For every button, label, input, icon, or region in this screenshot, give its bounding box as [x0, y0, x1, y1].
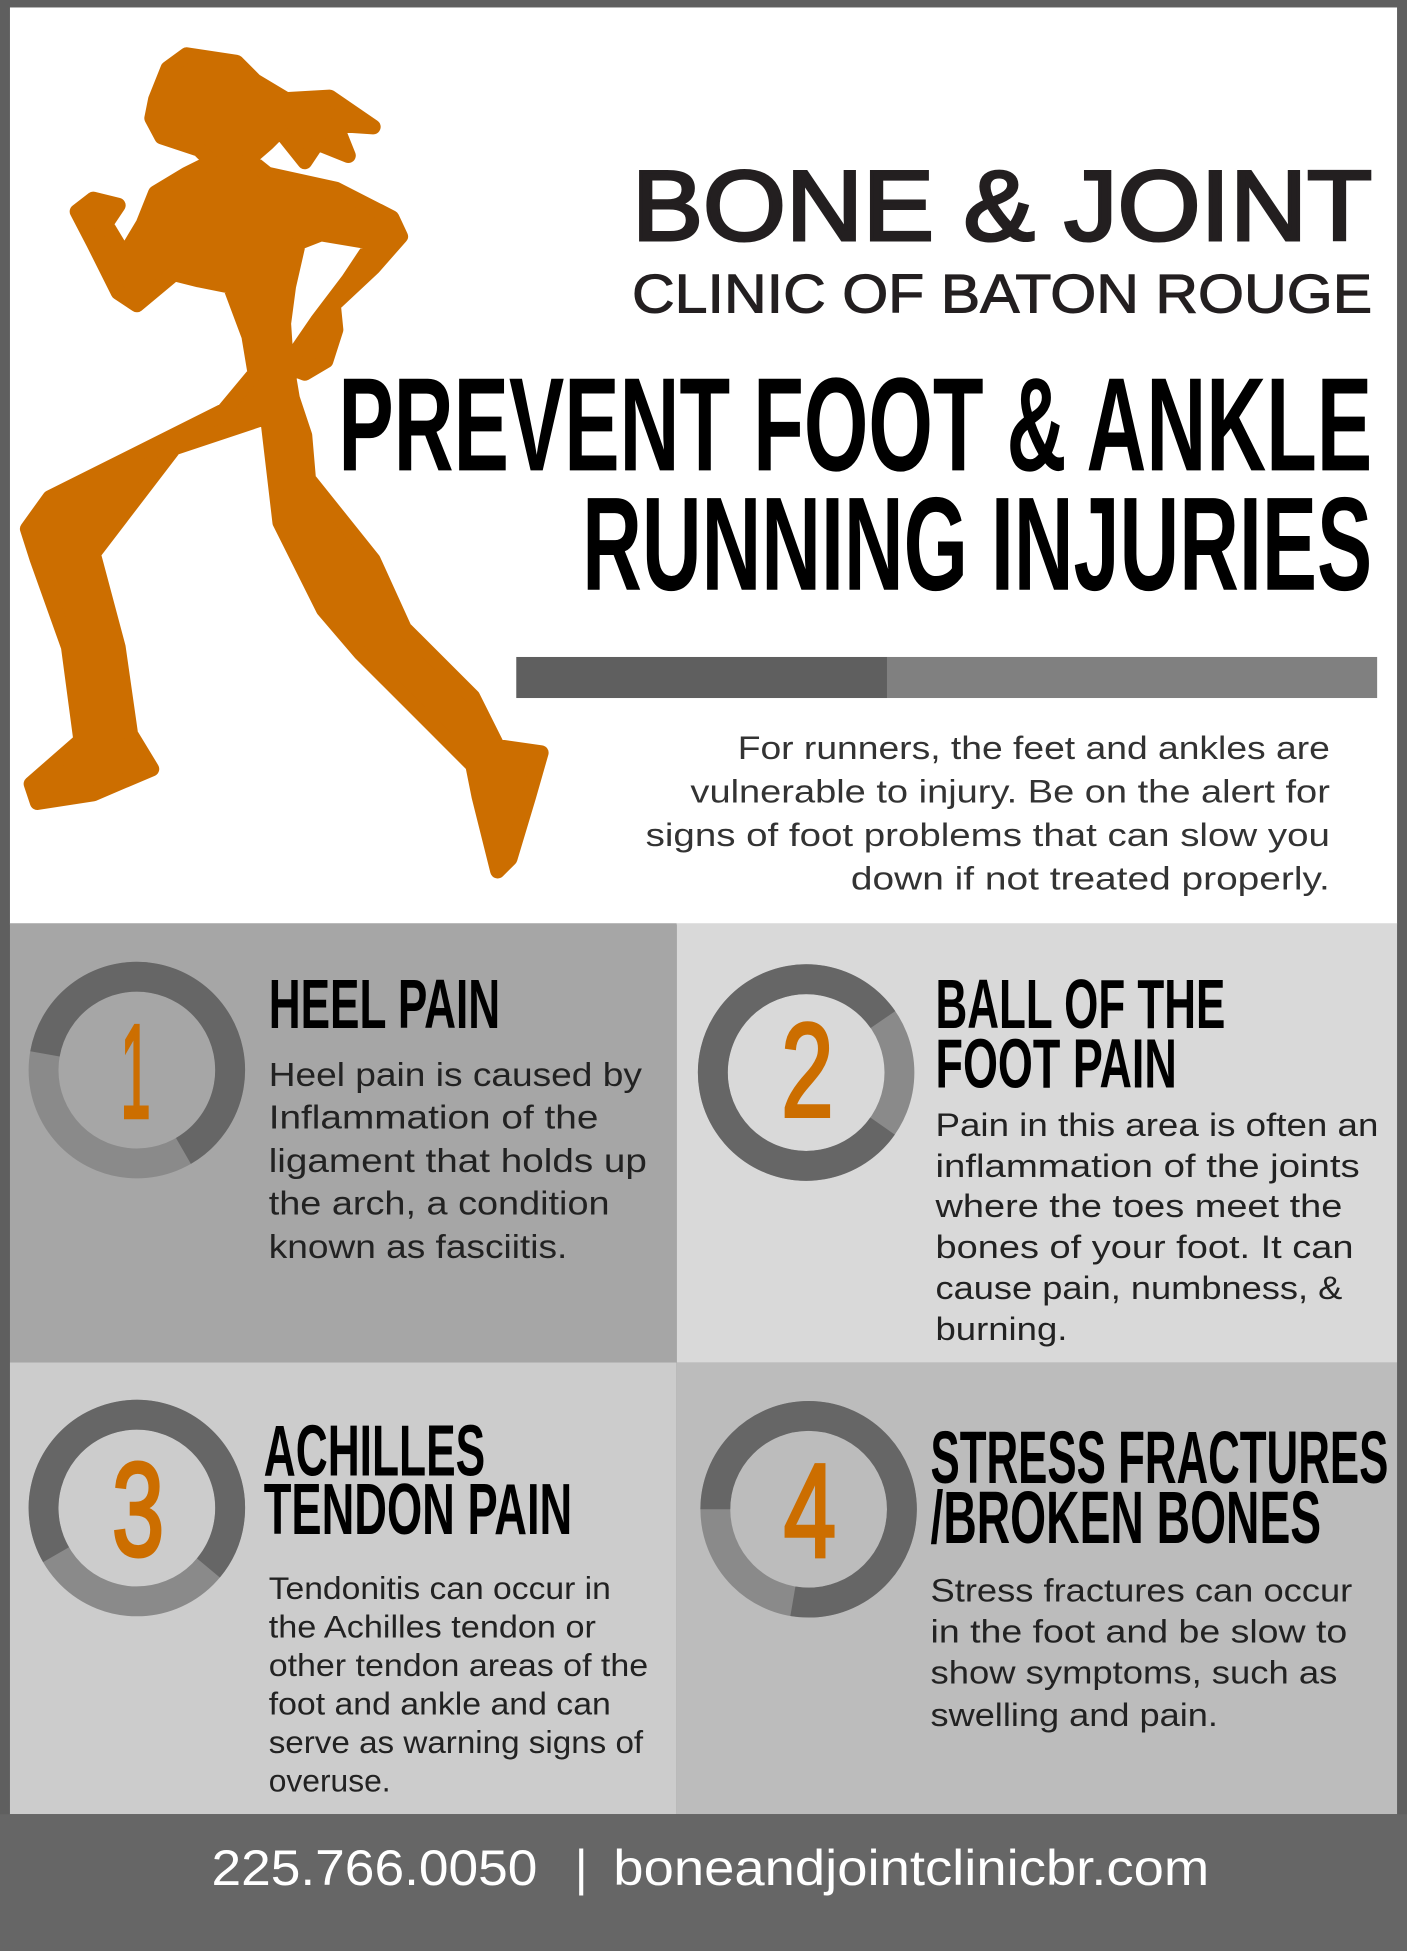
- intro text: [646, 730, 1330, 897]
- body: the Achilles tendon or: [269, 1609, 596, 1644]
- body: [934, 1107, 1378, 1347]
- body: known as fasciitis.: [269, 1229, 567, 1266]
- intro text: signs of foot problems that can slow you: [646, 817, 1330, 853]
- heading: [931, 1415, 1388, 1559]
- body: ligament that holds up: [269, 1143, 647, 1180]
- body: in the foot and be slow to: [931, 1613, 1347, 1649]
- body: the arch, a condition: [269, 1185, 610, 1222]
- heading: [936, 965, 1225, 1102]
- footer: 225.766.0050: [211, 1840, 537, 1896]
- panel 1: heel pain: [10, 923, 677, 1362]
- icon: ring 2: 2: [781, 996, 834, 1145]
- intro text: vulnerable to injury. Be on the alert for: [690, 774, 1330, 810]
- panel 2: ball of the foot: [676, 923, 1397, 1362]
- icon: ring 4: [715, 1416, 902, 1603]
- body: [269, 1057, 647, 1266]
- body: cause pain, numbness, &: [936, 1270, 1343, 1306]
- panel 3: achilles: [9, 1362, 677, 1814]
- body: Tendonitis can occur in: [269, 1571, 611, 1606]
- icon: ring 3: 3: [112, 1435, 164, 1584]
- body: Inflammation of the: [269, 1100, 598, 1137]
- intro text: down if not treated properly.: [851, 861, 1330, 897]
- heading: FOOT PAIN: [936, 1024, 1177, 1102]
- body: other tendon areas of the: [269, 1648, 648, 1683]
- heading: ACHILLES: [264, 1412, 485, 1492]
- logo: CLINIC OF BATON ROUGE: [632, 262, 1372, 324]
- progress bar: [516, 657, 1377, 698]
- body: [931, 1572, 1353, 1733]
- footer: |: [575, 1840, 588, 1896]
- body: bones of your foot. It can: [936, 1229, 1354, 1265]
- body: overuse.: [269, 1764, 391, 1799]
- heading: TENDON PAIN: [264, 1470, 572, 1550]
- body: foot and ankle and can: [269, 1687, 611, 1722]
- logo: [632, 151, 1372, 324]
- body: Pain in this area is often an: [936, 1107, 1378, 1143]
- icon: ring 3: [9, 1381, 264, 1636]
- body: swelling and pain.: [931, 1697, 1218, 1733]
- body: inflammation of the joints: [936, 1148, 1360, 1184]
- body: serve as warning signs of: [269, 1725, 644, 1760]
- intro text: For runners, the feet and ankles are: [738, 730, 1330, 766]
- footer: [0, 1814, 1407, 1951]
- body: [269, 1571, 648, 1799]
- logo: BONE & JOINT: [632, 151, 1372, 262]
- panel 4: stress fractures: [677, 1362, 1397, 1814]
- icon: ring 4: 4: [784, 1437, 836, 1586]
- body: where the toes meet the: [934, 1188, 1342, 1224]
- runner silhouette: [27, 55, 541, 871]
- body: show symptoms, such as: [931, 1654, 1337, 1690]
- body: Heel pain is caused by: [269, 1057, 642, 1094]
- icon: ring 2: [676, 943, 936, 1203]
- heading: BALL OF THE: [936, 965, 1225, 1043]
- title: [338, 350, 1372, 619]
- body: burning.: [936, 1311, 1067, 1347]
- heading: [264, 1412, 572, 1550]
- heading: HEEL PAIN: [269, 965, 500, 1043]
- body: Stress fractures can occur: [931, 1572, 1353, 1608]
- footer: boneandjointclinicbr.com: [613, 1840, 1209, 1896]
- icon: ring 1: 1: [121, 997, 151, 1146]
- icon: ring 1: [29, 962, 245, 1178]
